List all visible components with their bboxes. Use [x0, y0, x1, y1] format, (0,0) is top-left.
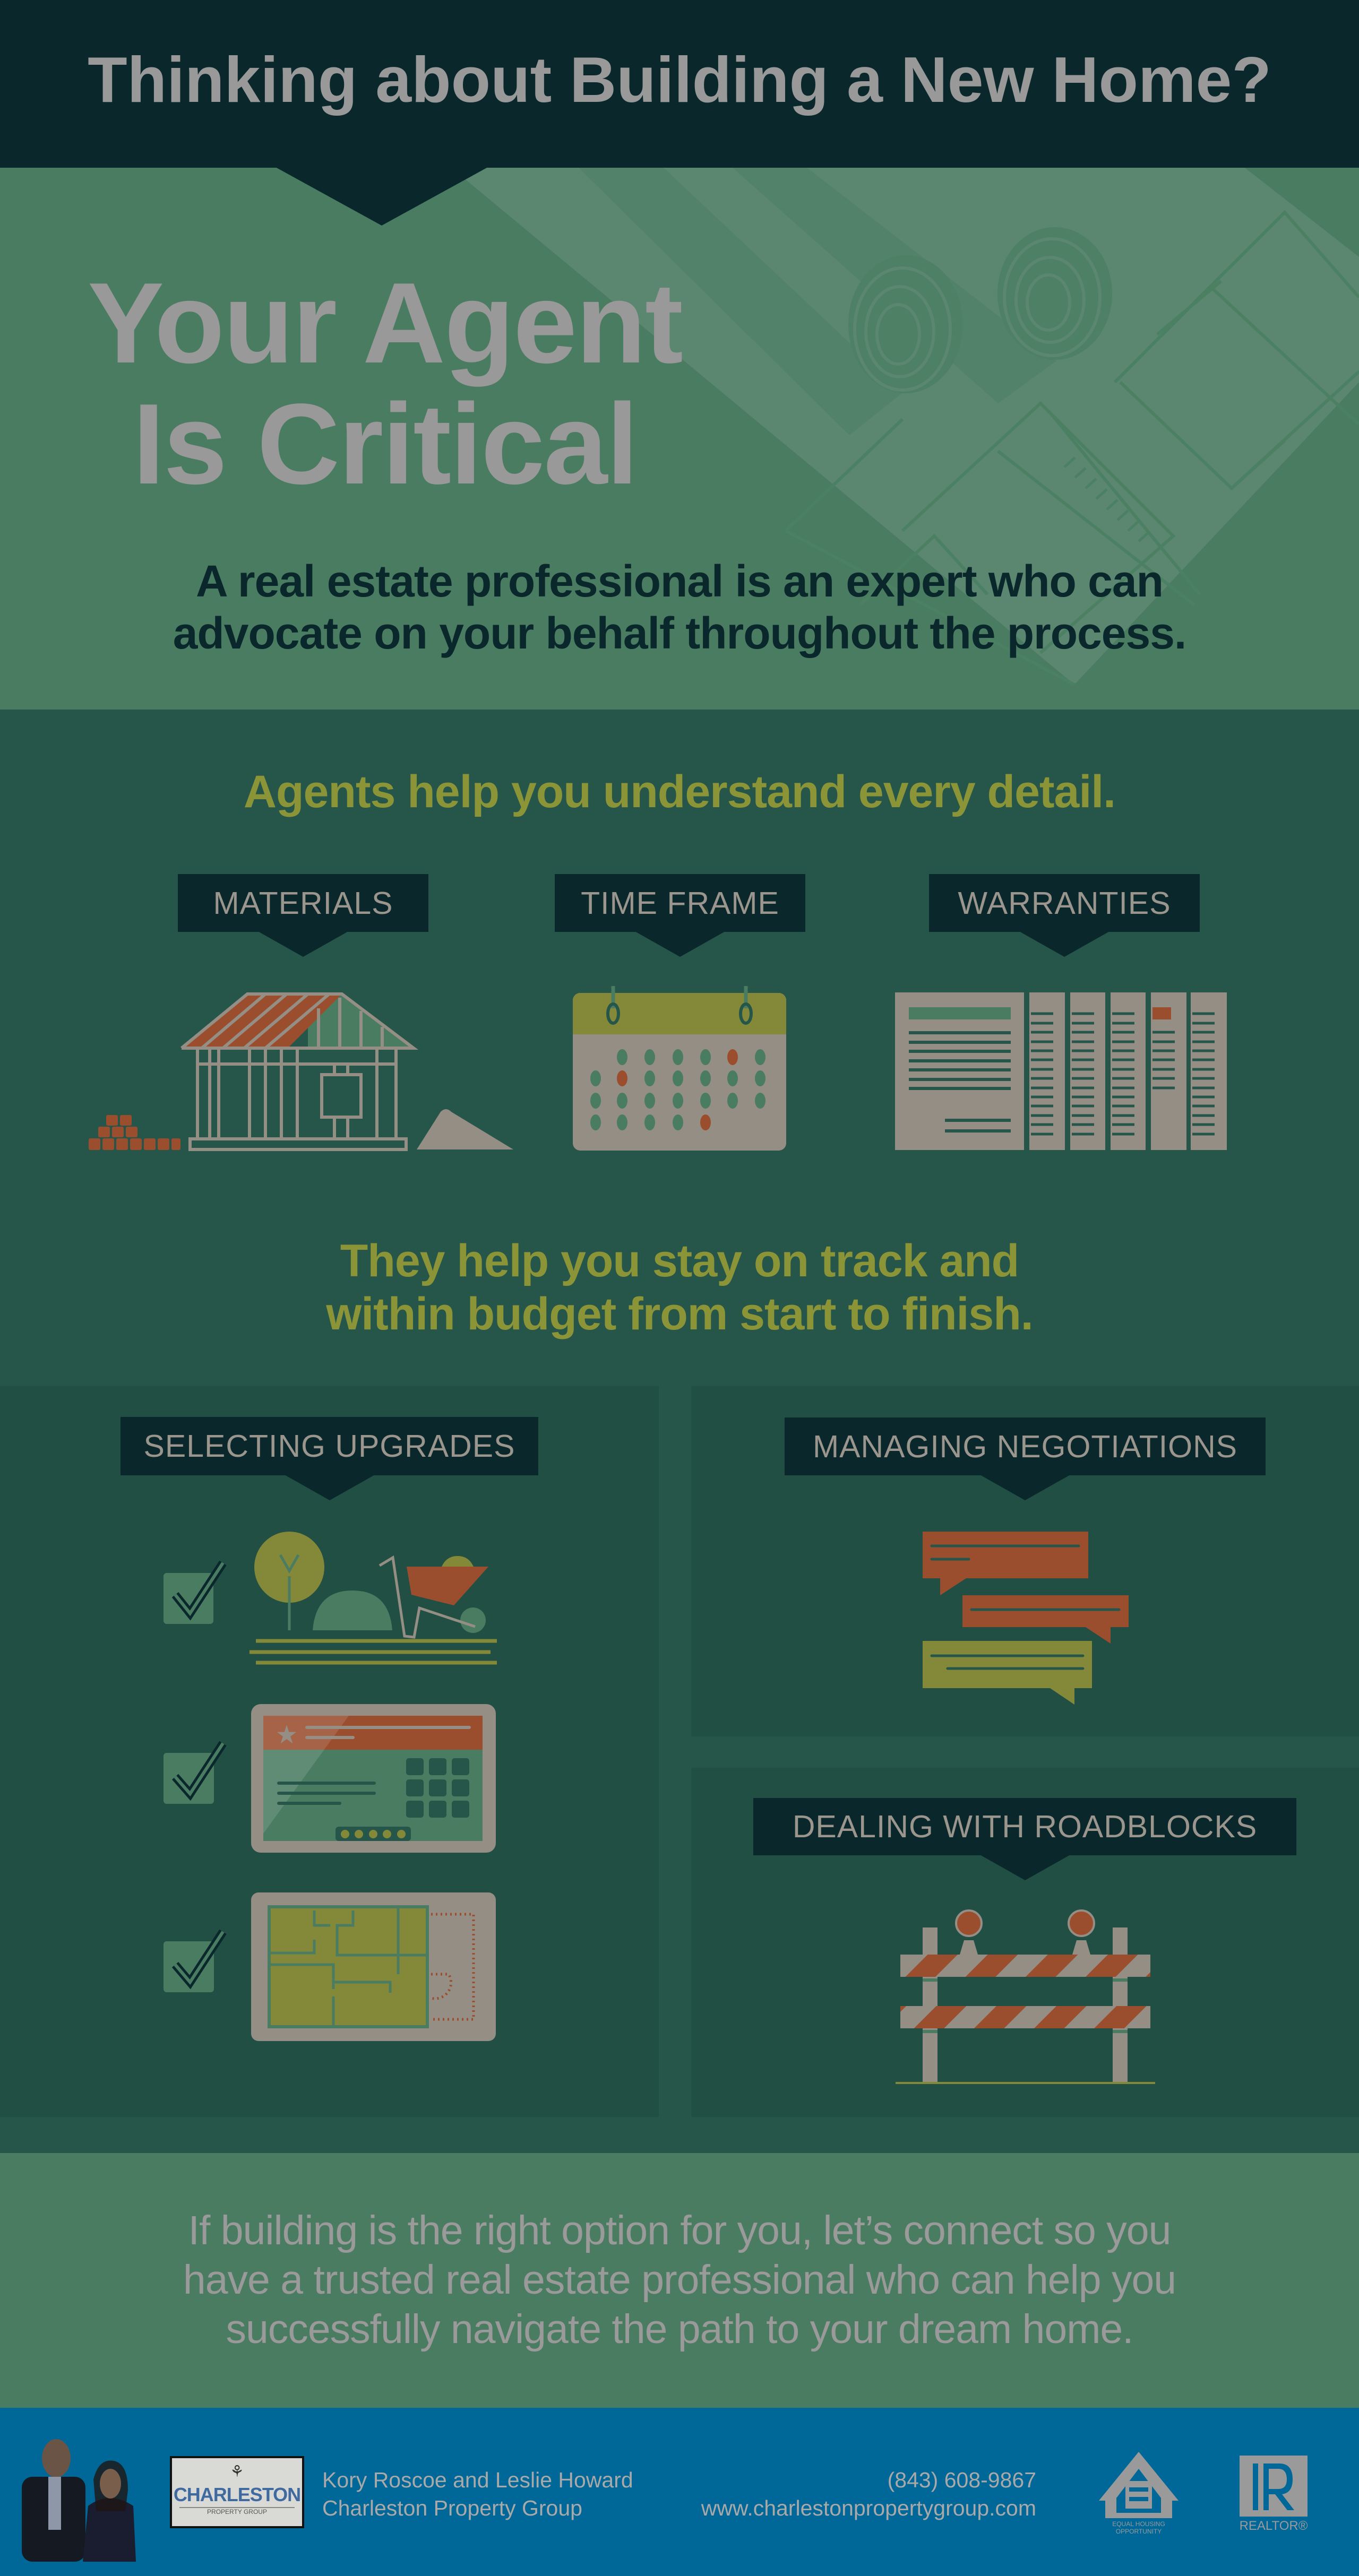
company logo: [170, 2456, 304, 2528]
icon: tablet checklist item: [164, 1704, 496, 1853]
label: dealing with roadblocks: [753, 1798, 1296, 1855]
panel: managing negotiations: [691, 1386, 1359, 1736]
hero subtitle: [173, 556, 1186, 658]
hero subtitle: advocate on your behalf throughout the process.: [173, 608, 1186, 658]
company logo: ⚘: [230, 2463, 244, 2480]
call to action text: have a trusted real estate professional who can help you: [183, 2257, 1176, 2303]
call to action text: If building is the right option for you, let’s connect so you: [188, 2208, 1171, 2253]
call to action text: successfully navigate the path to your dream home.: [226, 2306, 1133, 2352]
agent names: Kory Roscoe and Leslie Howard: [322, 2468, 633, 2492]
icon: chat bubbles: [923, 1532, 1129, 1705]
icon: calendar: [573, 986, 786, 1151]
label: warranties: WARRANTIES: [958, 885, 1171, 920]
heading: stay on track: They help you stay on track and: [340, 1235, 1019, 1286]
contact info: [701, 2468, 1036, 2520]
icon: warranty documents: [895, 992, 1227, 1150]
header title: Thinking about Building a New Home?: [88, 44, 1271, 116]
label: time frame: [555, 874, 805, 932]
heading: stay on track: [326, 1235, 1033, 1339]
label: selecting upgrades: SELECTING UPGRADES: [144, 1429, 515, 1464]
agent names: Charleston Property Group: [322, 2496, 582, 2520]
icon: realtor logo: [1240, 2456, 1308, 2532]
agent photo: [22, 2439, 136, 2562]
label: managing negotiations: MANAGING NEGOTIATIONS: [813, 1429, 1237, 1464]
icon: floor plan checklist item: [164, 1892, 496, 2041]
contact info: www.charlestonpropertygroup.com: [701, 2496, 1036, 2520]
label: dealing with roadblocks: DEALING WITH ROADBLOCKS: [793, 1809, 1257, 1844]
blueprint illustration: [466, 168, 1359, 684]
call to action text: [183, 2208, 1176, 2352]
footer: [0, 2408, 1359, 2576]
call to action section: [0, 2153, 1359, 2408]
agent names: [322, 2468, 633, 2520]
hero title: Your Agent: [88, 258, 682, 387]
hero subtitle: A real estate professional is an expert who can: [196, 556, 1163, 606]
label: materials: [178, 874, 428, 932]
icon: tablet checklist item: ★: [275, 1720, 298, 1750]
icon: equal housing opportunity: EQUAL HOUSING: [1112, 2520, 1165, 2528]
hero background section: [0, 168, 1359, 710]
header bar: [0, 0, 1359, 168]
label: selecting upgrades: [121, 1417, 538, 1475]
icon: road barrier: [896, 1909, 1155, 2084]
contact info: (843) 608-9867: [888, 2468, 1036, 2492]
heading: stay on track: within budget from start to finish.: [326, 1289, 1033, 1339]
icon: house frame with materials: [89, 992, 513, 1151]
label: warranties: [929, 874, 1200, 932]
label: materials: MATERIALS: [213, 885, 393, 920]
company logo: CHARLESTON: [174, 2484, 300, 2505]
label: time frame: TIME FRAME: [581, 885, 779, 920]
label: managing negotiations: [785, 1417, 1266, 1475]
company logo: PROPERTY GROUP: [207, 2508, 267, 2516]
icon: landscaping checklist item: [164, 1532, 497, 1664]
heading: agents help: Agents help you understand every detail.: [244, 766, 1115, 817]
hero title: [88, 258, 682, 508]
hero title: Is Critical: [133, 379, 637, 508]
header notch: [276, 167, 488, 226]
panel: selecting upgrades: [0, 1386, 659, 2117]
icon: equal housing opportunity: [1099, 2452, 1179, 2535]
icon: equal housing opportunity: OPPORTUNITY: [1116, 2528, 1162, 2535]
panel: dealing with roadblocks: [691, 1768, 1359, 2117]
